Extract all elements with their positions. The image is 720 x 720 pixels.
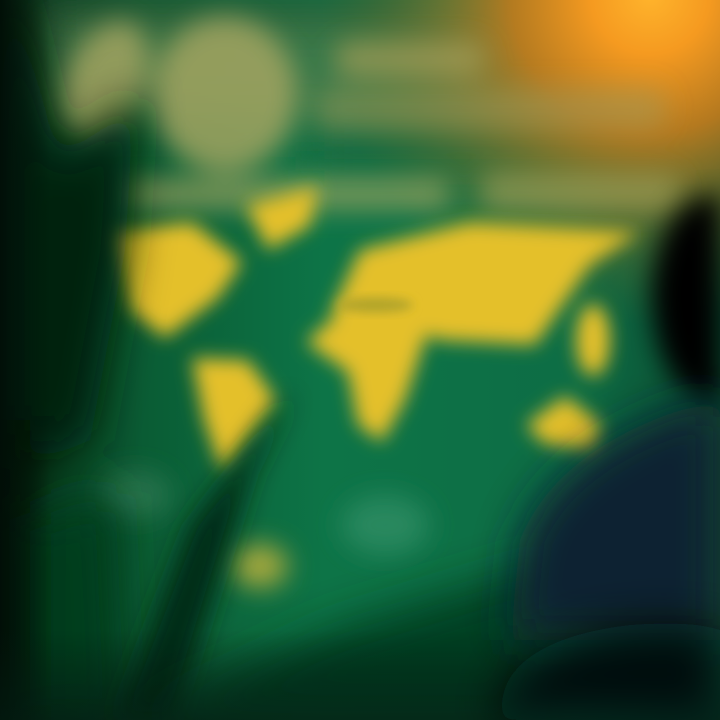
dark left foliage — [0, 0, 135, 720]
top band — [0, 0, 720, 170]
sunlight glow — [0, 0, 720, 340]
island: southeast — [526, 396, 602, 452]
pale northern landmasses — [44, 8, 680, 210]
continent: central peninsula — [306, 312, 430, 442]
dark figure at right — [652, 195, 720, 405]
continent: southern blob — [192, 358, 276, 472]
continent: western blob — [112, 222, 242, 338]
yellow landmasses — [112, 186, 640, 472]
continent: upper small blob — [246, 186, 318, 250]
left edge shade — [0, 0, 50, 720]
dark lower foliage — [140, 560, 560, 720]
figure body — [510, 398, 720, 640]
figure shadow — [495, 623, 720, 720]
faint bottom patches — [99, 471, 429, 588]
continent: large eastern mass — [330, 222, 640, 345]
dark diagonal leaf — [115, 390, 295, 720]
bottom edge shade — [0, 630, 720, 720]
island: eastern — [576, 304, 610, 376]
muted inland patch — [337, 297, 413, 313]
